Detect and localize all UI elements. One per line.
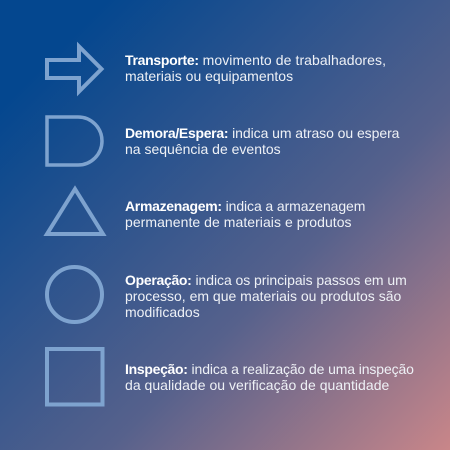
text: Demora/Espera: Demora/Espera: indica um atraso ou espera [125, 125, 399, 141]
text: Inspeção [125, 360, 414, 393]
icon: transport arrow [47, 46, 102, 92]
text: Operação: Operação: indica os principais passos em um [125, 272, 407, 288]
text: Operação: processo, em que materiais ou produtos são [125, 288, 401, 304]
icon: storage triangle [47, 189, 103, 234]
text: Armazenagem [125, 198, 365, 230]
text: Transporte: materiais ou equipamentos [125, 68, 293, 84]
icon: delay D shape [47, 117, 102, 165]
text: Demora/Espera [125, 125, 400, 157]
icon: inspection square [47, 349, 102, 404]
text: Transporte [125, 52, 386, 84]
icon: operation circle [47, 267, 102, 322]
text: Transporte: Transporte: movimento de trabalhadores, [125, 52, 386, 68]
text: Inspeção: da qualidade ou verificação de quantidade [125, 377, 389, 393]
text: Armazenagem: Armazenagem: indica a armazenagem [125, 198, 365, 214]
text: Operação [125, 272, 407, 320]
text: Inspeção: Inspeção: indica a realização de uma inspeção [125, 360, 414, 376]
text: Operação: modificados [125, 304, 200, 320]
text: Armazenagem: permanente de materiais e produtos [125, 214, 352, 230]
text: Demora/Espera: na sequência de eventos [125, 141, 281, 157]
